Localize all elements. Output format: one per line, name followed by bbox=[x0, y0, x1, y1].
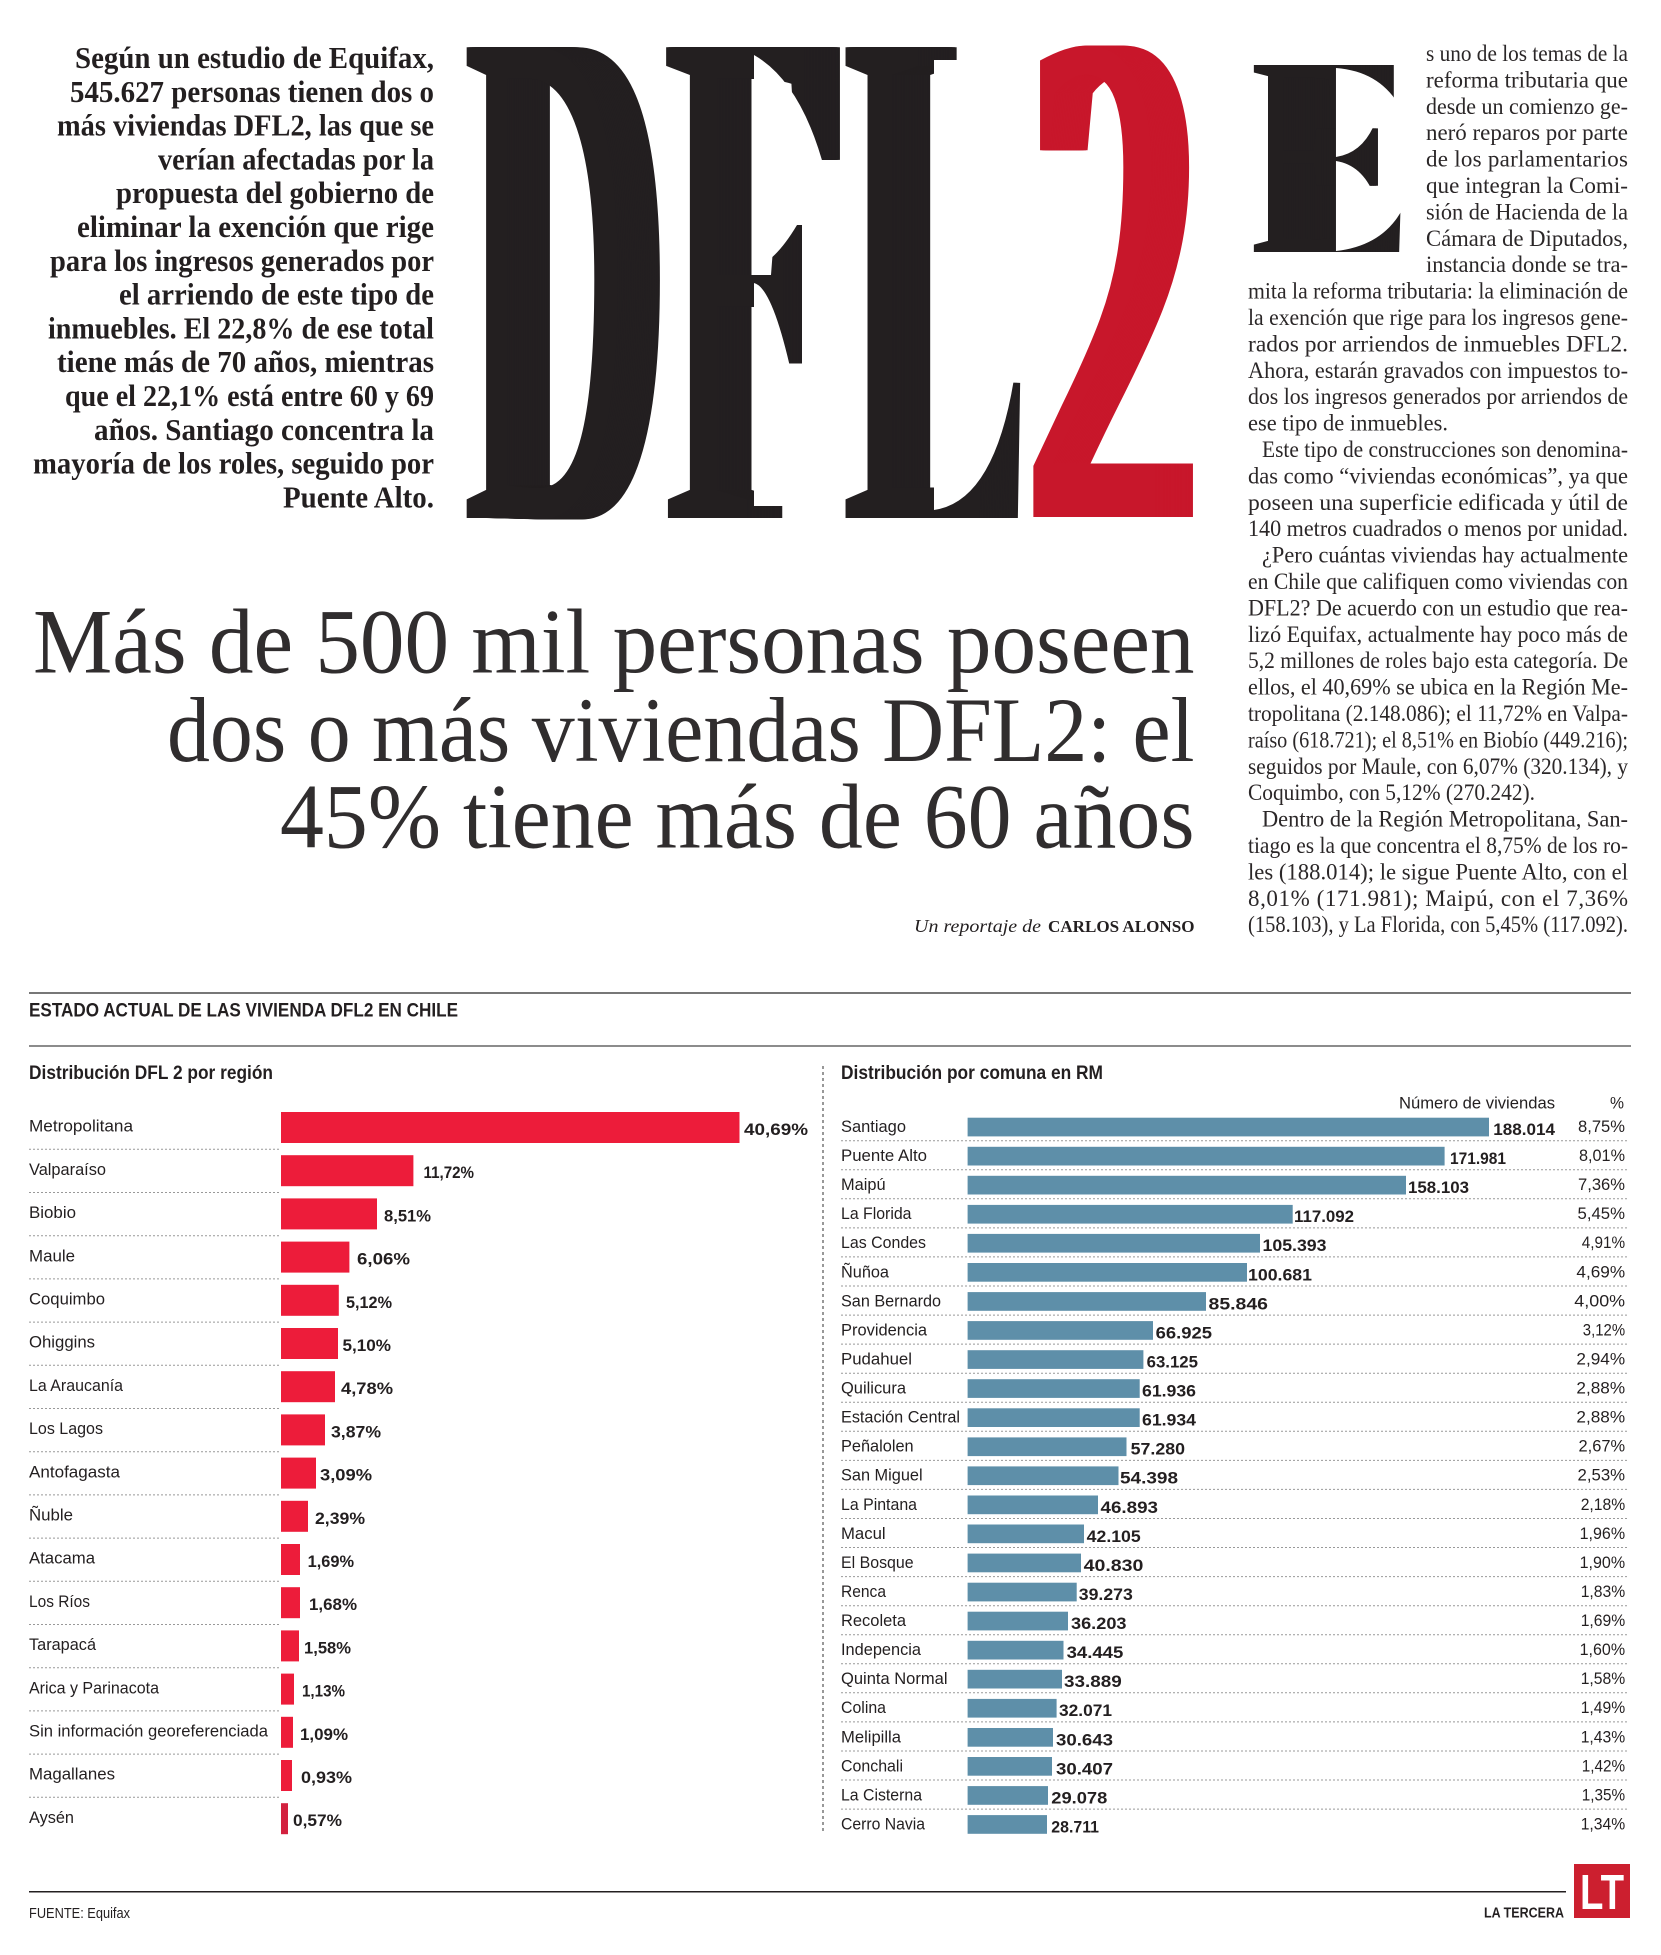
row: Peñalolen: Peñalolen bbox=[841, 1437, 914, 1456]
row: San Miguel: 2,53% bbox=[1578, 1466, 1625, 1485]
row: Ñuble: Ñuble bbox=[29, 1506, 73, 1524]
row: Ohiggins: Ohiggins bbox=[29, 1333, 95, 1352]
row: Ñuñoa: Ñuñoa bbox=[841, 1262, 890, 1281]
row: Metropolitana: 40,69% bbox=[744, 1120, 808, 1139]
row: Biobio bbox=[29, 1198, 431, 1229]
article body text: poseen una superficie edificada y útil de bbox=[1248, 490, 1628, 515]
brand name: LA TERCERA bbox=[1484, 1906, 1564, 1922]
row: La Florida: La Florida bbox=[841, 1204, 912, 1223]
row: Conchali: Conchali bbox=[841, 1756, 903, 1775]
row: Antofagasta: Antofagasta bbox=[29, 1462, 121, 1481]
row: Estación Central bbox=[841, 1408, 1625, 1430]
row: Pudahuel: 63.125 bbox=[1147, 1352, 1198, 1372]
intro text block: mayoría de los roles, seguido por bbox=[33, 447, 434, 481]
heading: region chart: Distribución DFL 2 por región bbox=[29, 1063, 273, 1084]
row: Ñuñoa: 100.681 bbox=[1248, 1265, 1312, 1284]
article body text: Ahora, estarán gravados con impuestos to- bbox=[1248, 358, 1628, 383]
row: San Miguel bbox=[841, 1466, 1625, 1488]
source note: FUENTE: Equifax bbox=[29, 1905, 130, 1922]
row: Indepencia: 1,60% bbox=[1580, 1640, 1625, 1659]
row: La Pintana: 46.893 bbox=[1100, 1498, 1158, 1517]
row: Santiago: 188.014 bbox=[1493, 1120, 1556, 1139]
row: Colina: Colina bbox=[841, 1698, 887, 1717]
row: Cerro Navia: Cerro Navia bbox=[841, 1814, 925, 1833]
row: Los Lagos bbox=[29, 1414, 381, 1445]
row: Quinta Normal: 1,58% bbox=[1581, 1669, 1625, 1688]
intro text block: verían afectadas por la bbox=[158, 142, 434, 176]
article body text: ellos, el 40,69% se ubica en la Región Me- bbox=[1248, 675, 1628, 700]
row: Estación Central: Estación Central bbox=[841, 1408, 960, 1427]
row: Las Condes: Las Condes bbox=[841, 1233, 926, 1252]
row: Ñuble: 2,39% bbox=[315, 1509, 365, 1528]
row: Estación Central: 2,88% bbox=[1576, 1408, 1625, 1427]
article body text: de los parlamentarios bbox=[1426, 147, 1628, 172]
row: Atacama: Atacama bbox=[29, 1549, 96, 1568]
row: Arica y Parinacota bbox=[29, 1674, 345, 1705]
row: Maipú: 7,36% bbox=[1578, 1175, 1625, 1194]
row: Recoleta: 1,69% bbox=[1581, 1611, 1625, 1630]
article body text: sión de Hacienda de la bbox=[1426, 199, 1628, 224]
row: San Miguel: 54.398 bbox=[1120, 1469, 1178, 1488]
row: Magallanes bbox=[29, 1760, 352, 1791]
heading: commune chart: Distribución por comuna en RM bbox=[841, 1063, 1103, 1084]
intro text block: eliminar la exención que rige bbox=[77, 210, 434, 244]
row: Maule: 6,06% bbox=[357, 1250, 410, 1269]
article body text: Este tipo de construcciones son denomina- bbox=[1262, 437, 1628, 462]
article body text: mita la reforma tributaria: la eliminación de bbox=[1248, 279, 1628, 304]
column headers bbox=[1399, 1095, 1624, 1113]
row: Pudahuel bbox=[841, 1350, 1625, 1372]
row: Macul: 1,96% bbox=[1580, 1524, 1625, 1543]
row: La Cisterna: 1,35% bbox=[1582, 1785, 1625, 1804]
article body text: DFL2? De acuerdo con un estudio que rea- bbox=[1248, 595, 1628, 620]
row: Recoleta: Recoleta bbox=[841, 1611, 907, 1630]
row: Macul: Macul bbox=[841, 1524, 886, 1543]
row: Macul: 42.105 bbox=[1087, 1527, 1141, 1546]
row: Maule bbox=[29, 1242, 410, 1273]
row: Maipú: Maipú bbox=[841, 1175, 886, 1194]
intro text block: que el 22,1% está entre 60 y 69 bbox=[65, 379, 434, 413]
row: Las Condes bbox=[841, 1233, 1625, 1255]
row: La Pintana bbox=[841, 1495, 1625, 1517]
article body text: dos los ingresos generados por arriendos de bbox=[1248, 384, 1628, 409]
row: Recoleta bbox=[841, 1611, 1625, 1633]
row: Peñalolen bbox=[841, 1437, 1625, 1459]
row: San Bernardo: 85.846 bbox=[1208, 1294, 1268, 1313]
article body text: s uno de los temas de la bbox=[1426, 41, 1628, 66]
row: Coquimbo: 5,12% bbox=[346, 1293, 392, 1312]
row: Sin información georeferenciada bbox=[29, 1717, 348, 1748]
row: Cerro Navia: 28.711 bbox=[1051, 1817, 1099, 1836]
article body text: seguidos por Maule, con 6,07% (320.134), y bbox=[1248, 754, 1628, 779]
headline bbox=[33, 591, 1194, 868]
column headers: Número de viviendas bbox=[1399, 1095, 1555, 1113]
row: Ohiggins: 5,10% bbox=[342, 1336, 391, 1355]
intro text block: Puente Alto. bbox=[283, 480, 434, 514]
row: Renca: Renca bbox=[841, 1582, 886, 1601]
intro text block: tiene más de 70 años, mientras bbox=[57, 345, 434, 379]
article body text: Dentro de la Región Metropolitana, San- bbox=[1262, 807, 1628, 832]
row: Melipilla: 30.643 bbox=[1056, 1730, 1113, 1749]
row: Colina bbox=[841, 1698, 1625, 1720]
row: Puente Alto: Puente Alto bbox=[841, 1146, 927, 1165]
row: San Bernardo bbox=[841, 1291, 1625, 1313]
article body text: tropolitana (2.148.086); el 11,72% en Valpa- bbox=[1248, 701, 1628, 726]
row: Los Ríos: Los Ríos bbox=[29, 1592, 90, 1611]
article body text: que integran la Comi- bbox=[1426, 173, 1628, 198]
row: Puente Alto: 8,01% bbox=[1579, 1146, 1625, 1165]
row: Tarapacá: Tarapacá bbox=[29, 1635, 97, 1654]
row: Los Lagos: 3,87% bbox=[331, 1422, 381, 1441]
row: Providencia: 3,12% bbox=[1583, 1320, 1625, 1339]
row: La Cisterna bbox=[841, 1785, 1625, 1807]
row: La Araucanía: 4,78% bbox=[341, 1379, 393, 1398]
row: Sin información georeferenciada: Sin información georeferenciada bbox=[29, 1722, 269, 1740]
row: Peñalolen: 2,67% bbox=[1578, 1437, 1625, 1456]
article body text: les (188.014); le sigue Puente Alto, con el bbox=[1248, 859, 1628, 884]
row: Cerro Navia bbox=[841, 1814, 1625, 1836]
byline bbox=[914, 916, 1194, 936]
article body text: Coquimbo, con 5,12% (270.242). bbox=[1248, 780, 1535, 805]
row: La Cisterna: La Cisterna bbox=[841, 1785, 923, 1804]
row: Estación Central: 61.934 bbox=[1142, 1411, 1197, 1430]
row: Maipú: 158.103 bbox=[1408, 1178, 1469, 1197]
row: Metropolitana bbox=[29, 1112, 808, 1143]
intro text block: para los ingresos generados por bbox=[50, 244, 434, 278]
article body text: tiago es la que concentra el 8,75% de los ro- bbox=[1248, 833, 1628, 858]
article body text: 5,2 millones de roles bajo esta categoría. De bbox=[1248, 648, 1628, 673]
section title: ESTADO ACTUAL DE LAS VIVIENDA DFL2 EN CHILE bbox=[29, 1001, 458, 1022]
row: Biobio: 8,51% bbox=[384, 1206, 431, 1225]
row: Peñalolen: 57.280 bbox=[1131, 1440, 1185, 1459]
row: La Pintana: La Pintana bbox=[841, 1495, 918, 1514]
headline: dos o más viviendas DFL2: el bbox=[167, 679, 1194, 781]
row: La Cisterna: 29.078 bbox=[1051, 1788, 1107, 1807]
row: La Florida bbox=[841, 1204, 1625, 1226]
intro text block: Según un estudio de Equifax, bbox=[75, 41, 434, 75]
row: Colina: 1,49% bbox=[1581, 1698, 1625, 1717]
article body text bbox=[1248, 41, 1628, 937]
panel: distribution by commune bbox=[841, 1063, 1628, 1836]
intro text block: el arriendo de este tipo de bbox=[119, 278, 434, 312]
row: Quinta Normal: Quinta Normal bbox=[841, 1669, 948, 1688]
row: San Miguel: San Miguel bbox=[841, 1466, 923, 1485]
row: Melipilla bbox=[841, 1727, 1625, 1749]
row: Ñuñoa bbox=[841, 1262, 1625, 1284]
intro text block: más viviendas DFL2, las que se bbox=[57, 109, 434, 143]
row: Quinta Normal bbox=[841, 1669, 1625, 1691]
row: Tarapacá: 1,58% bbox=[304, 1638, 351, 1657]
row: La Florida: 5,45% bbox=[1578, 1204, 1625, 1223]
row: Biobio: Biobio bbox=[29, 1203, 76, 1222]
intro text block: inmuebles. El 22,8% de ese total bbox=[48, 311, 434, 345]
row: Santiago bbox=[841, 1117, 1625, 1139]
article body text: en Chile que califiquen como viviendas con bbox=[1248, 569, 1628, 594]
row: Atacama bbox=[29, 1544, 354, 1575]
article body text: ¿Pero cuántas viviendas hay actualmente bbox=[1262, 543, 1628, 568]
row: Valparaíso: 11,72% bbox=[424, 1163, 474, 1182]
row: Colina: 32.071 bbox=[1059, 1701, 1112, 1720]
title: DFL2 bbox=[460, 0, 1193, 674]
intro text block: 545.627 personas tienen dos o bbox=[70, 75, 434, 109]
row: El Bosque: 40.830 bbox=[1084, 1556, 1143, 1575]
row: Puente Alto: 171.981 bbox=[1450, 1149, 1506, 1168]
row: La Florida: 117.092 bbox=[1294, 1207, 1354, 1226]
row: Pudahuel: 2,94% bbox=[1576, 1350, 1625, 1368]
row: Melipilla: 1,43% bbox=[1581, 1727, 1625, 1746]
panel: distribution by region bbox=[29, 1063, 808, 1834]
row: Conchali: 1,42% bbox=[1582, 1756, 1625, 1775]
row: Aysén: 0,57% bbox=[293, 1811, 342, 1830]
row: Providencia bbox=[841, 1320, 1625, 1342]
row: El Bosque: El Bosque bbox=[841, 1553, 914, 1572]
row: La Araucanía bbox=[29, 1371, 393, 1402]
row: Quilicura: Quilicura bbox=[841, 1378, 907, 1398]
row: San Bernardo: San Bernardo bbox=[841, 1291, 941, 1310]
byline: Un reportaje de bbox=[914, 916, 1041, 936]
row: La Pintana: 2,18% bbox=[1581, 1495, 1625, 1514]
article body text: desde un comienzo ge- bbox=[1426, 94, 1628, 119]
row: Macul bbox=[841, 1524, 1625, 1546]
row: Coquimbo bbox=[29, 1285, 392, 1316]
row: Conchali: 30.407 bbox=[1056, 1759, 1113, 1778]
row: Indepencia bbox=[841, 1640, 1625, 1662]
row: Magallanes: 0,93% bbox=[301, 1768, 352, 1787]
row: Renca: 39.273 bbox=[1079, 1585, 1133, 1604]
drop cap: E: E bbox=[1249, 0, 1352, 314]
article body text: la exención que rige para los ingresos gene- bbox=[1248, 305, 1628, 330]
row: Quilicura: 2,88% bbox=[1576, 1378, 1625, 1398]
row: Arica y Parinacota: Arica y Parinacota bbox=[29, 1678, 160, 1697]
row: Indepencia: 34.445 bbox=[1067, 1643, 1123, 1662]
headline: Más de 500 mil personas poseen bbox=[33, 591, 1194, 693]
article body text: 8,01% (171.981); Maipú, con el 7,36% bbox=[1248, 886, 1628, 911]
row: Atacama: 1,69% bbox=[308, 1552, 354, 1571]
row: Metropolitana: Metropolitana bbox=[29, 1117, 134, 1136]
intro text block: propuesta del gobierno de bbox=[116, 176, 434, 210]
row: Antofagasta: 3,09% bbox=[320, 1466, 372, 1485]
row: Arica y Parinacota: 1,13% bbox=[302, 1682, 345, 1701]
row: Coquimbo: Coquimbo bbox=[29, 1290, 105, 1308]
intro text block bbox=[33, 41, 434, 514]
row: Valparaíso: Valparaíso bbox=[29, 1160, 106, 1179]
row: Maipú bbox=[841, 1175, 1625, 1197]
byline: CARLOS ALONSO bbox=[1048, 917, 1194, 936]
row: La Araucanía: La Araucanía bbox=[29, 1376, 123, 1395]
intro text block: años. Santiago concentra la bbox=[94, 413, 434, 447]
row: Ñuñoa: 4,69% bbox=[1576, 1262, 1625, 1281]
row: Quinta Normal: 33.889 bbox=[1064, 1672, 1122, 1691]
row: Puente Alto bbox=[841, 1146, 1625, 1168]
row: Ohiggins bbox=[29, 1328, 391, 1359]
row: Valparaíso bbox=[29, 1155, 474, 1186]
row: Renca: 1,83% bbox=[1581, 1582, 1625, 1601]
row: Pudahuel: Pudahuel bbox=[841, 1350, 912, 1368]
row: Tarapacá bbox=[29, 1630, 351, 1661]
row: Magallanes: Magallanes bbox=[29, 1765, 115, 1784]
row: Melipilla: Melipilla bbox=[841, 1727, 902, 1746]
column headers: % bbox=[1610, 1095, 1624, 1113]
row: Los Ríos: 1,68% bbox=[309, 1595, 357, 1614]
row: Sin información georeferenciada: 1,09% bbox=[300, 1725, 348, 1744]
row: Conchali bbox=[841, 1756, 1625, 1778]
row: Quilicura bbox=[841, 1378, 1625, 1400]
row: Santiago: Santiago bbox=[841, 1117, 906, 1136]
row: Los Ríos bbox=[29, 1587, 357, 1618]
row: Las Condes: 4,91% bbox=[1582, 1233, 1625, 1252]
article body text: lizó Equifax, actualmente hay poco más de bbox=[1248, 622, 1628, 647]
row: Los Lagos: Los Lagos bbox=[29, 1419, 103, 1438]
row: Quilicura: 61.936 bbox=[1142, 1382, 1196, 1400]
row: El Bosque: 1,90% bbox=[1580, 1553, 1625, 1572]
article body text: 140 metros cuadrados o menos por unidad. bbox=[1248, 516, 1628, 541]
row: Santiago: 8,75% bbox=[1578, 1117, 1625, 1136]
row: Providencia: 66.925 bbox=[1156, 1323, 1212, 1342]
row: El Bosque bbox=[841, 1553, 1625, 1575]
row: Aysén bbox=[29, 1803, 342, 1834]
row: Maule: Maule bbox=[29, 1246, 75, 1265]
row: Antofagasta bbox=[29, 1458, 372, 1489]
article body text: ese tipo de inmuebles. bbox=[1248, 411, 1448, 436]
row: Indepencia: Indepencia bbox=[841, 1640, 922, 1659]
row: Las Condes: 105.393 bbox=[1262, 1236, 1326, 1255]
headline: 45% tiene más de 60 años bbox=[280, 766, 1194, 868]
article body text: das como “viviendas económicas”, ya que bbox=[1248, 463, 1628, 488]
article body text: Cámara de Diputados, bbox=[1426, 226, 1628, 251]
row: Recoleta: 36.203 bbox=[1071, 1614, 1126, 1633]
row: Providencia: Providencia bbox=[841, 1320, 928, 1339]
row: Cerro Navia: 1,34% bbox=[1581, 1814, 1625, 1833]
article body text: instancia donde se tra- bbox=[1426, 252, 1628, 277]
row: Aysén: Aysén bbox=[29, 1808, 74, 1827]
row: Renca bbox=[841, 1582, 1625, 1604]
row: San Bernardo: 4,00% bbox=[1574, 1291, 1625, 1310]
row: Ñuble bbox=[29, 1501, 365, 1532]
article body text: reforma tributaria que bbox=[1426, 67, 1628, 92]
article body text: rados por arriendos de inmuebles DFL2. bbox=[1248, 331, 1628, 356]
logo: LT: LT bbox=[1580, 1866, 1624, 1920]
article body text: neró reparos por parte bbox=[1426, 120, 1628, 145]
